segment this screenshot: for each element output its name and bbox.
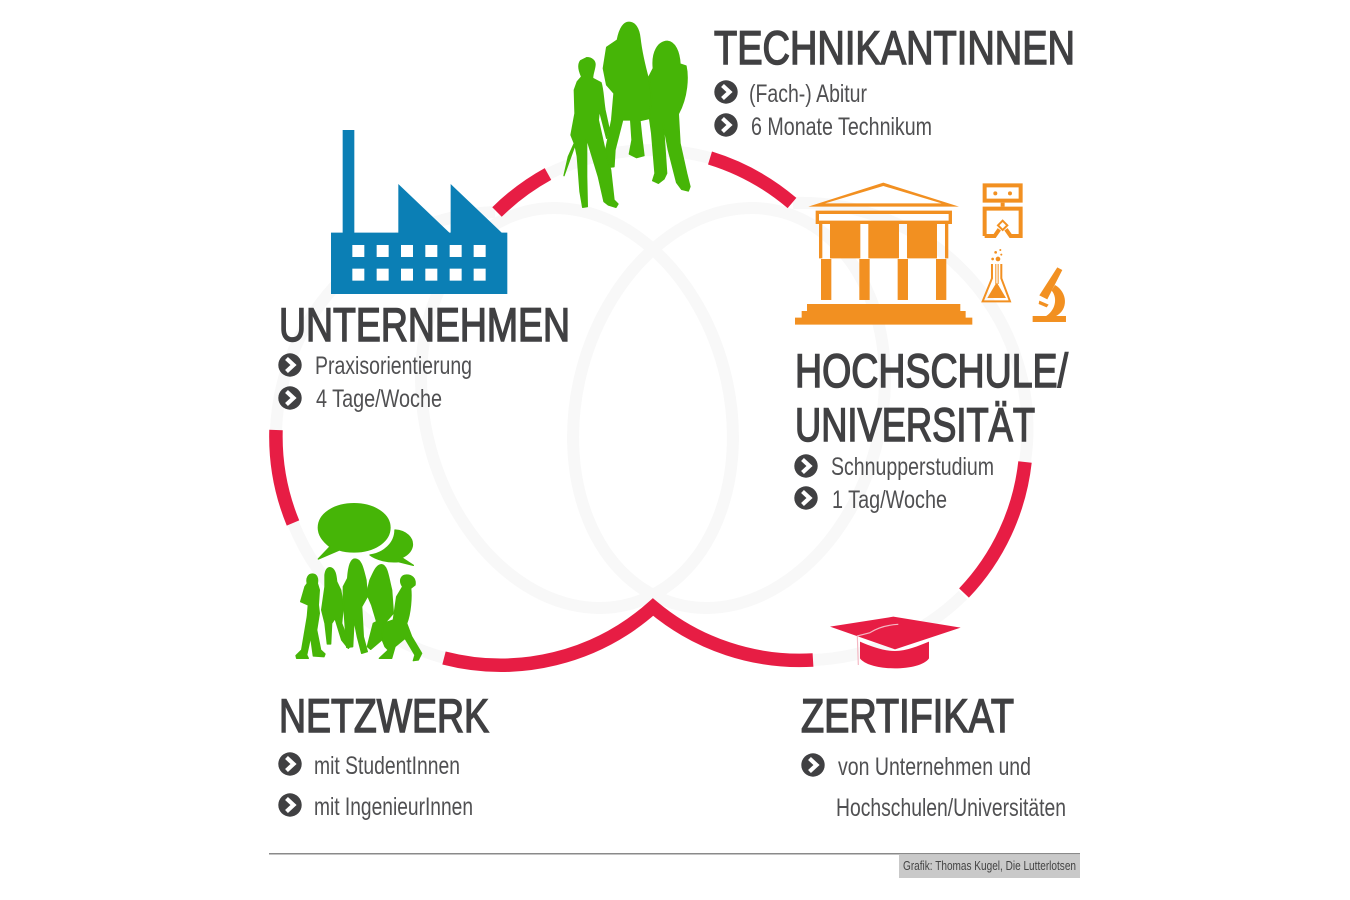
panel: hochschule xyxy=(794,345,1069,514)
panel: netzwerk xyxy=(278,690,489,821)
icon: graduation cap xyxy=(830,617,961,668)
icon: flask xyxy=(983,249,1010,301)
text: ingenieurinnen: mit IngenieurInnen xyxy=(314,793,473,821)
credit box xyxy=(899,855,1080,878)
bullet icon xyxy=(278,386,302,410)
bullet icon xyxy=(714,80,738,104)
text: studentinnen: mit StudentInnen xyxy=(314,752,460,780)
text: tage pro woche: 4 Tage/Woche xyxy=(316,385,442,413)
bullet icon xyxy=(794,486,818,510)
panel: technikantinnen xyxy=(714,22,1075,141)
red cycle arcs xyxy=(276,158,1025,665)
heading: technikantinnen: TECHNIKANTINNEN xyxy=(714,22,1075,75)
heading: netzwerk: NETZWERK xyxy=(279,690,489,743)
icon: network group with speech bubbles xyxy=(296,504,422,661)
icon: lab device xyxy=(983,183,1023,236)
bullet icon xyxy=(278,793,302,817)
credit box: Grafik: Thomas Kugel, Die Lutterlotsen xyxy=(903,859,1076,873)
text: schnupperstudium: Schnupperstudium xyxy=(831,453,994,481)
panel: unternehmen xyxy=(278,299,570,413)
faint background rings xyxy=(276,150,1027,660)
heading: universitaet: UNIVERSITÄT xyxy=(795,399,1035,452)
text: technikum: 6 Monate Technikum xyxy=(751,113,932,141)
bullet icon xyxy=(278,752,302,776)
text: von unternehmen und: von Unternehmen und xyxy=(838,753,1031,781)
bullet icon xyxy=(714,113,738,137)
bullet icon xyxy=(794,454,818,478)
panel: zertifikat xyxy=(801,690,1066,822)
bullet icon xyxy=(278,353,302,377)
icon: university building xyxy=(795,183,972,325)
text: abitur: (Fach-) Abitur xyxy=(749,80,867,108)
text: tag pro woche: 1 Tag/Woche xyxy=(832,486,947,514)
heading: hochschule: HOCHSCHULE/ xyxy=(795,345,1069,398)
bullet icon xyxy=(801,753,825,777)
icon: three women silhouettes xyxy=(564,22,690,207)
heading: zertifikat: ZERTIFIKAT xyxy=(801,690,1014,743)
icon: microscope xyxy=(1033,267,1066,322)
icon: factory xyxy=(331,130,507,294)
text: hochschulen und universitaeten: Hochschulen/Universitäten xyxy=(836,794,1066,822)
heading: unternehmen: UNTERNEHMEN xyxy=(279,299,570,352)
text: praxisorientierung: Praxisorientierung xyxy=(315,352,472,380)
